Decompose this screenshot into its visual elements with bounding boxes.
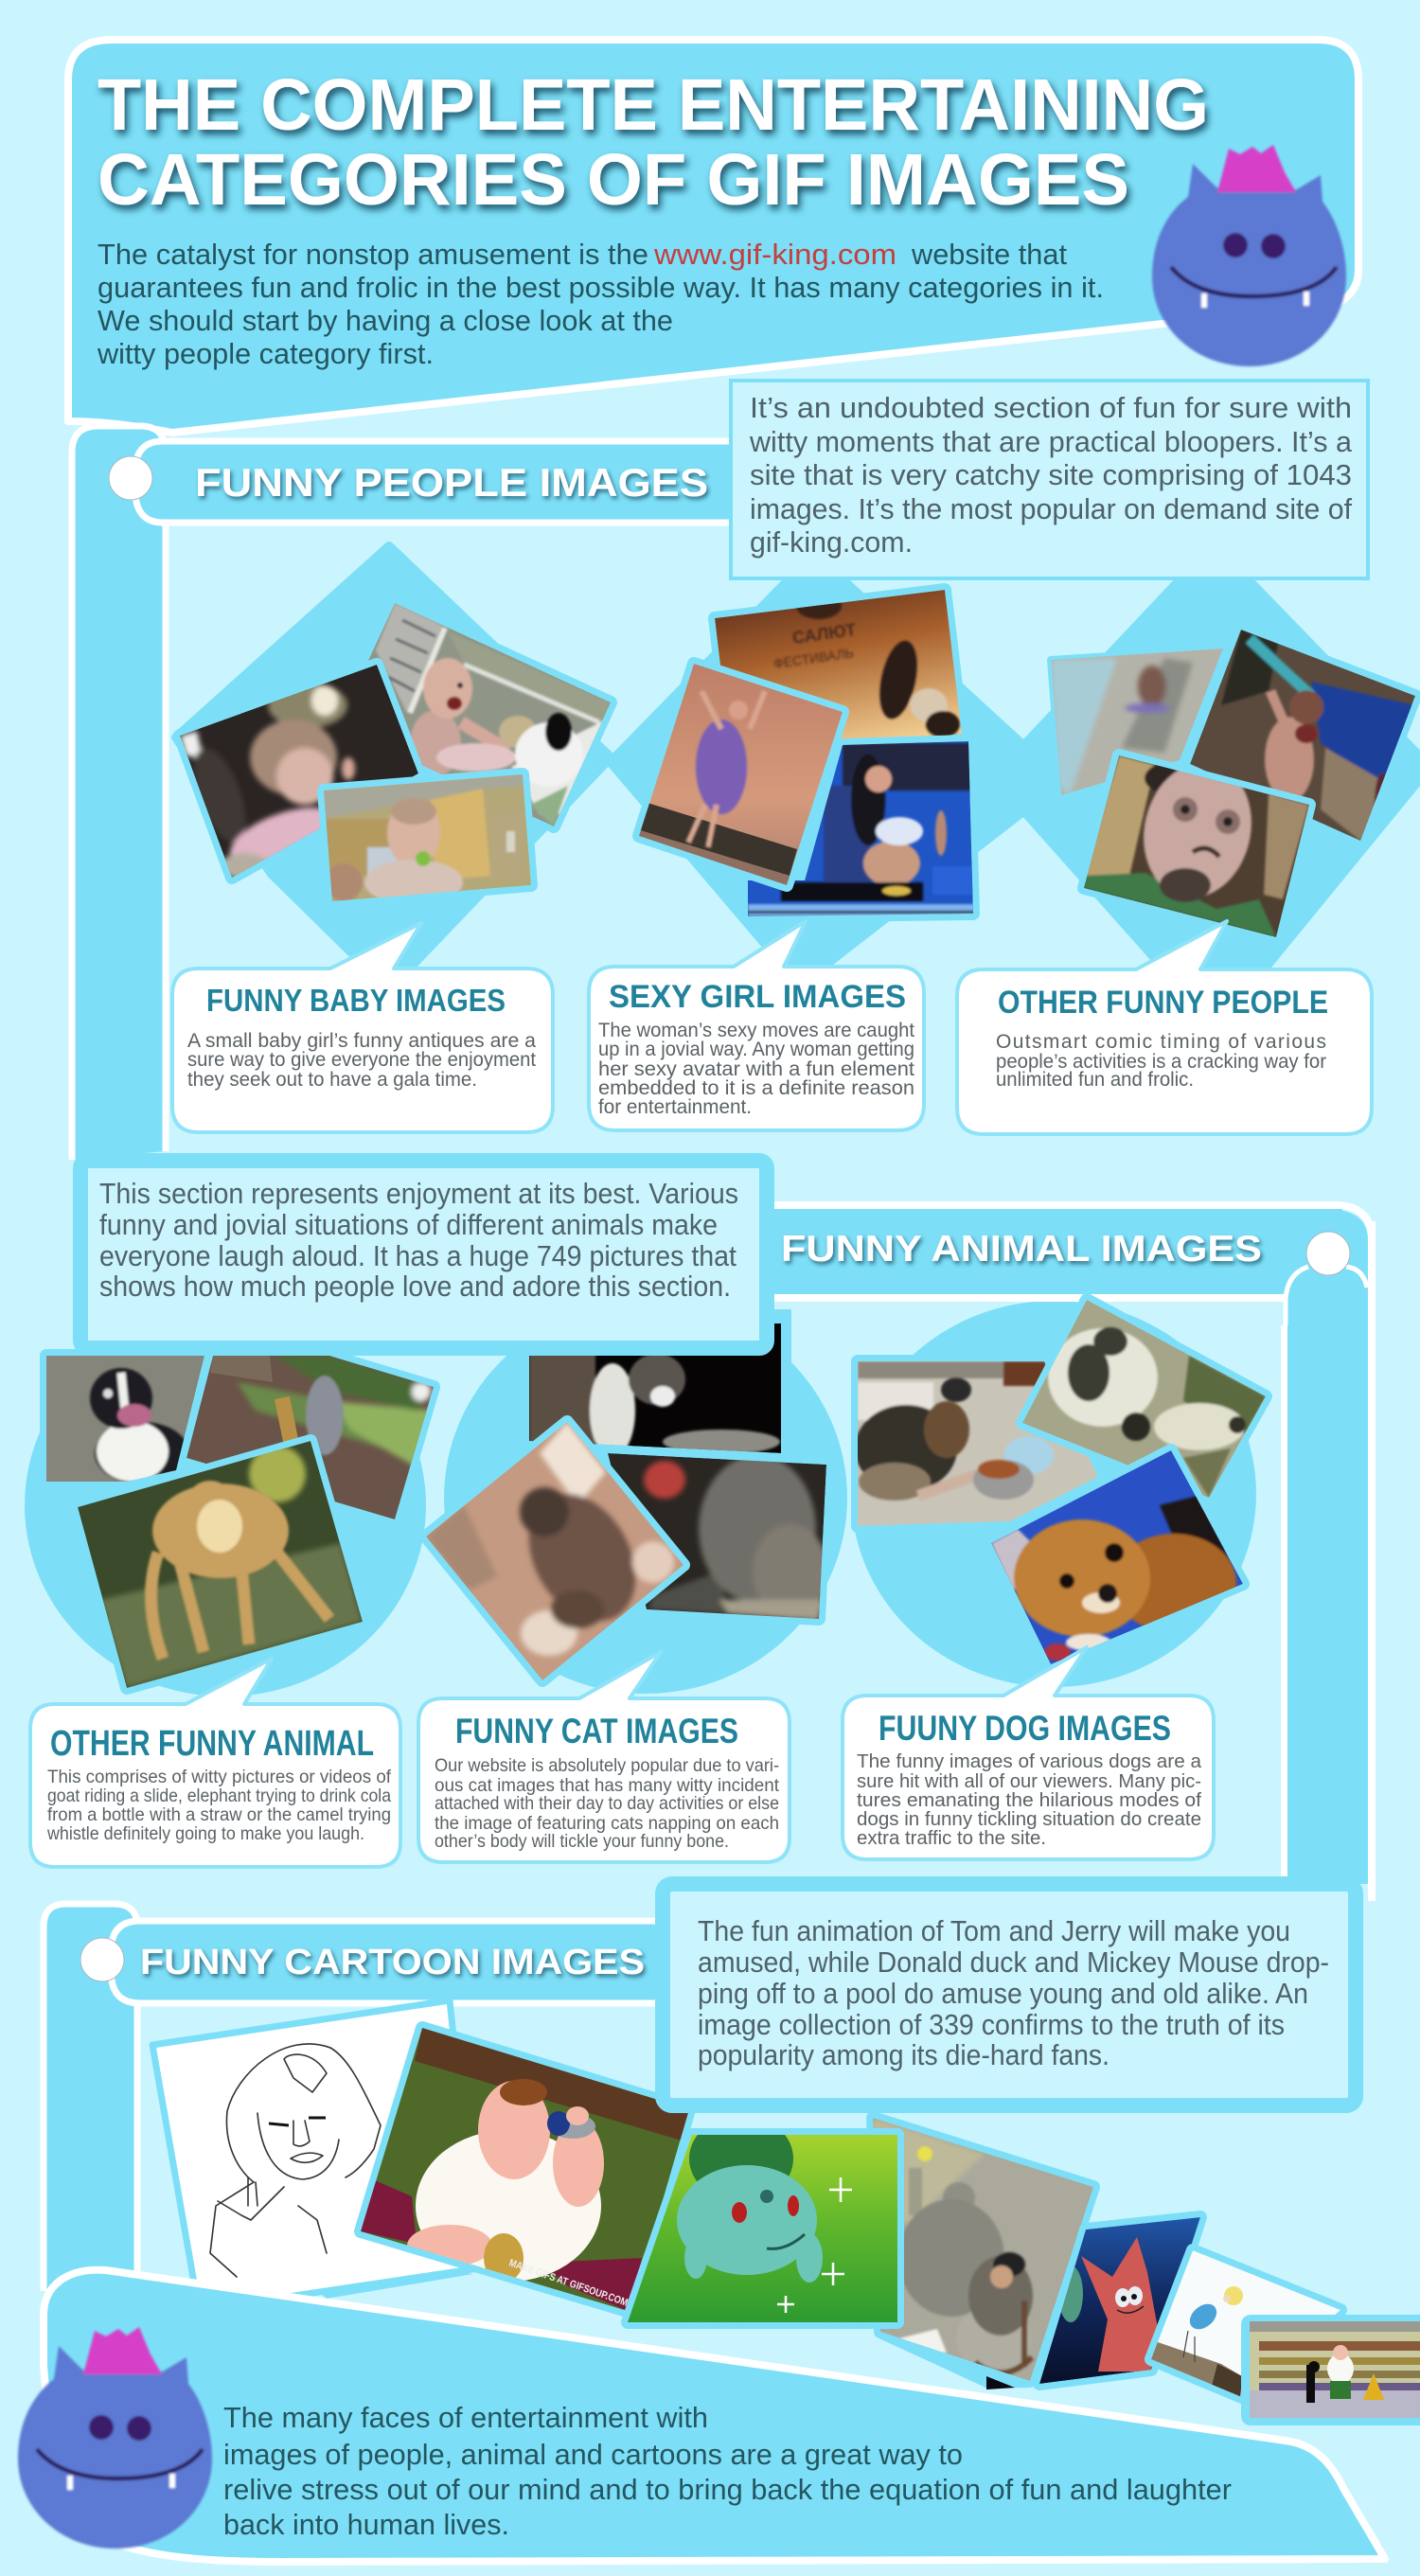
callout: other funny animal: goat riding a slide, elephant trying to drink cola: [47, 1785, 391, 1806]
heading: funny cartoon images: FUNNY CARTOON IMAGES: [140, 1943, 645, 1982]
text box: funny cartoon description: amused, while Donald duck and Mickey Mouse drop-: [698, 1946, 1329, 1979]
text box: funny cartoon description: popularity among its die-hard fans.: [698, 2039, 1109, 2071]
text box: funny people description: images. It’s the most popular on demand site of: [750, 493, 1353, 525]
icon: mascot bottom: [18, 2327, 212, 2549]
photo: cheerleader: [748, 741, 975, 916]
dot: [109, 456, 152, 500]
photo: line drawing of woman: [152, 2000, 478, 2310]
text box: funny animal description: funny and jovial situations of different animals make: [99, 1209, 718, 1241]
photo: stage dancers: ФЕСТИВАЛЬ: [772, 645, 855, 671]
callout: funny baby images: [172, 923, 553, 1132]
conclusion text: back into human lives.: [223, 2508, 509, 2541]
intro text: witty people category first.: [97, 337, 434, 370]
photo: family guy: [361, 2028, 689, 2312]
callout: other funny people: OTHER FUNNY PEOPLE: [998, 985, 1328, 1021]
callout: sexy girl images: up in a jovial way. Any woman getting: [598, 1039, 914, 1060]
photo: camel: [78, 1441, 363, 1688]
photo: bulbasaur: [625, 2115, 899, 2324]
callout: other funny people: [957, 921, 1372, 1134]
panel: header: [68, 40, 1358, 433]
photo: patrick star: [1039, 2217, 1200, 2384]
callout: other funny animal: from a bottle with a straw or the camel trying: [47, 1804, 391, 1825]
photo: family guy: MAKE GIFS AT GIFSOUP.COM: [507, 2257, 630, 2309]
text box: funny animal description: This section represents enjoyment at its best. Various: [99, 1178, 738, 1210]
photo: man with towel: [1190, 630, 1415, 841]
text box: funny people description: gif-king.com.: [750, 526, 913, 559]
photo: stage dancers: САЛЮТ: [791, 620, 857, 648]
photo: german shepherd: [855, 1361, 1098, 1526]
callout: sexy girl images: embedded to it is a definite reason: [598, 1077, 914, 1099]
intro text: website that: [911, 238, 1067, 271]
photo: bug-eyed man: [1084, 752, 1309, 937]
heading: funny people images: FUNNY PEOPLE IMAGES: [195, 460, 708, 505]
intro text: [97, 238, 1104, 370]
text box: funny cartoon description: The fun animation of Tom and Jerry will make you: [698, 1915, 1290, 1947]
photo: spotted dogs: [1022, 1300, 1266, 1498]
photo: crying baby: [324, 774, 531, 905]
intro text: The catalyst for nonstop amusement is the: [98, 238, 648, 271]
callout: sexy girl images: [589, 921, 924, 1130]
photo: laughing baby: [338, 603, 611, 826]
callout: fuuny dog images: tures emanating the hilarious modes of: [857, 1789, 1201, 1811]
dot: [1306, 1232, 1350, 1275]
panel: conclusion: [44, 2270, 1385, 2562]
icon: mascot top: [1152, 145, 1346, 366]
callout: other funny people: unlimited fun and frolic.: [996, 1069, 1194, 1091]
text box: funny people description: witty moments that are practical bloopers. It’s a: [749, 426, 1352, 458]
callout: fuuny dog images: The funny images of various dogs are a: [857, 1750, 1202, 1772]
callout: sexy girl images: SEXY GIRL IMAGES: [609, 979, 906, 1015]
callout: fuuny dog images: FUUNY DOG IMAGES: [879, 1709, 1171, 1748]
text box: funny people description: site that is very catchy site comprising of 1043: [750, 459, 1352, 491]
diamonds behind people photos: [176, 544, 1420, 1027]
conclusion text: images of people, animal and cartoons are a great way to: [223, 2438, 963, 2471]
text box: funny animal description: shows how much people love and adore this section.: [99, 1270, 731, 1303]
dot: [80, 1938, 124, 1981]
intro text: guarantees fun and frolic in the best possible way. It has many categories in it.: [98, 271, 1104, 304]
photo: boston terrier: [46, 1356, 204, 1484]
callout: funny baby images: FUNNY BABY IMAGES: [206, 983, 506, 1018]
callout: funny cat images: the image of featuring cats napping on each: [435, 1813, 779, 1834]
photo: fluffy cat: [426, 1422, 683, 1680]
photo: girl in car seat: [180, 665, 418, 880]
vertical connector: animal section: [1285, 1221, 1372, 1901]
panel: funny people heading ribbon: [109, 441, 729, 523]
callout: funny cat images: Our website is absolutely popular due to vari-: [435, 1755, 779, 1776]
callout: other funny animal: whistle definitely going to make you laugh.: [46, 1823, 364, 1844]
callout: other funny people: people’s activities is a cracking way for: [996, 1051, 1326, 1073]
intro text: www.gif-king.com: [653, 238, 896, 271]
text box: funny cartoon description: [663, 1884, 1356, 2105]
title: CATEGORIES OF GIF IMAGES: [98, 139, 1129, 221]
text box: funny people description: [731, 381, 1368, 578]
photo: chihuahua: [991, 1450, 1243, 1664]
photo: stage dancers: [715, 590, 962, 762]
text box: funny animal description: [80, 1161, 767, 1348]
photo: sled slide: [1051, 648, 1223, 795]
callout: other funny animal: OTHER FUNNY ANIMAL: [50, 1724, 374, 1764]
panel: funny animal heading ribbon: [774, 1205, 1372, 1325]
photo: store scene: [1241, 2315, 1420, 2425]
callout: fuuny dog images: sure hit with all of our viewers. Many pic-: [857, 1770, 1201, 1792]
circles behind animal photos: [25, 1301, 1256, 1697]
callout: funny cat images: FUNNY CAT IMAGES: [455, 1712, 738, 1750]
callout: funny cat images: attached with their day to day activities or else: [435, 1793, 779, 1814]
vertical connector: people section: [72, 426, 166, 1160]
photo: tabby cat on black: [523, 1311, 790, 1459]
callout: sexy girl images: for entertainment.: [598, 1096, 752, 1118]
callout: sexy girl images: her sexy avatar with a fun element: [598, 1058, 914, 1080]
text box: funny people description: It’s an undoubted section of fun for sure with: [750, 392, 1352, 424]
callout: funny baby images: sure way to give everyone the enjoyment: [187, 1049, 536, 1071]
conclusion text: The many faces of entertainment with: [223, 2401, 708, 2434]
callout: other funny animal: This comprises of witty pictures or videos of: [47, 1767, 392, 1787]
callout: fuuny dog images: dogs in funny tickling situation do create: [857, 1808, 1201, 1830]
text box: funny cartoon description: ping off to a pool do amuse young and old alike. An: [698, 1978, 1308, 2010]
intro text: We should start by having a close look at the: [98, 304, 673, 337]
callout: fuuny dog images: extra traffic to the site.: [857, 1827, 1046, 1849]
callout: fuuny dog images: [843, 1647, 1214, 1859]
conclusion text: [223, 2401, 1232, 2541]
photo: dancing woman in purple: [639, 664, 843, 885]
vertical connector: cartoon section: [44, 1904, 137, 2291]
photo: goat: [186, 1356, 434, 1519]
photo: grey cat: [608, 1453, 828, 1621]
text box: funny animal description: everyone laugh aloud. It has a huge 749 pictures that: [99, 1240, 737, 1272]
callout: other funny animal: [30, 1659, 400, 1867]
callout: funny baby images: they seek out to have a gala time.: [187, 1069, 477, 1091]
callout: sexy girl images: The woman’s sexy moves are caught: [598, 1020, 914, 1041]
callout: other funny people: Outsmart comic timing of various: [996, 1031, 1326, 1053]
heading: funny animal images: FUNNY ANIMAL IMAGES: [781, 1229, 1262, 1270]
title: [98, 64, 1209, 221]
callout: funny cat images: other’s body will tickle your funny bone.: [435, 1831, 729, 1852]
conclusion text: relive stress out of our mind and to bring back the equation of fun and laughter: [223, 2473, 1232, 2506]
title: THE COMPLETE ENTERTAINING: [98, 64, 1209, 146]
panel: funny cartoon heading ribbon: [80, 1921, 655, 2003]
text box: funny cartoon description: image collection of 339 confirms to the truth of its: [698, 2009, 1285, 2041]
callout: funny baby images: A small baby girl’s funny antiques are a: [187, 1030, 536, 1052]
photo: statue cartoon: [873, 2118, 1093, 2389]
callout: funny cat images: [418, 1652, 790, 1862]
callout: funny cat images: ous cat images that has many witty incident: [435, 1775, 780, 1796]
photo: floating girl cartoon: [1149, 2250, 1340, 2400]
